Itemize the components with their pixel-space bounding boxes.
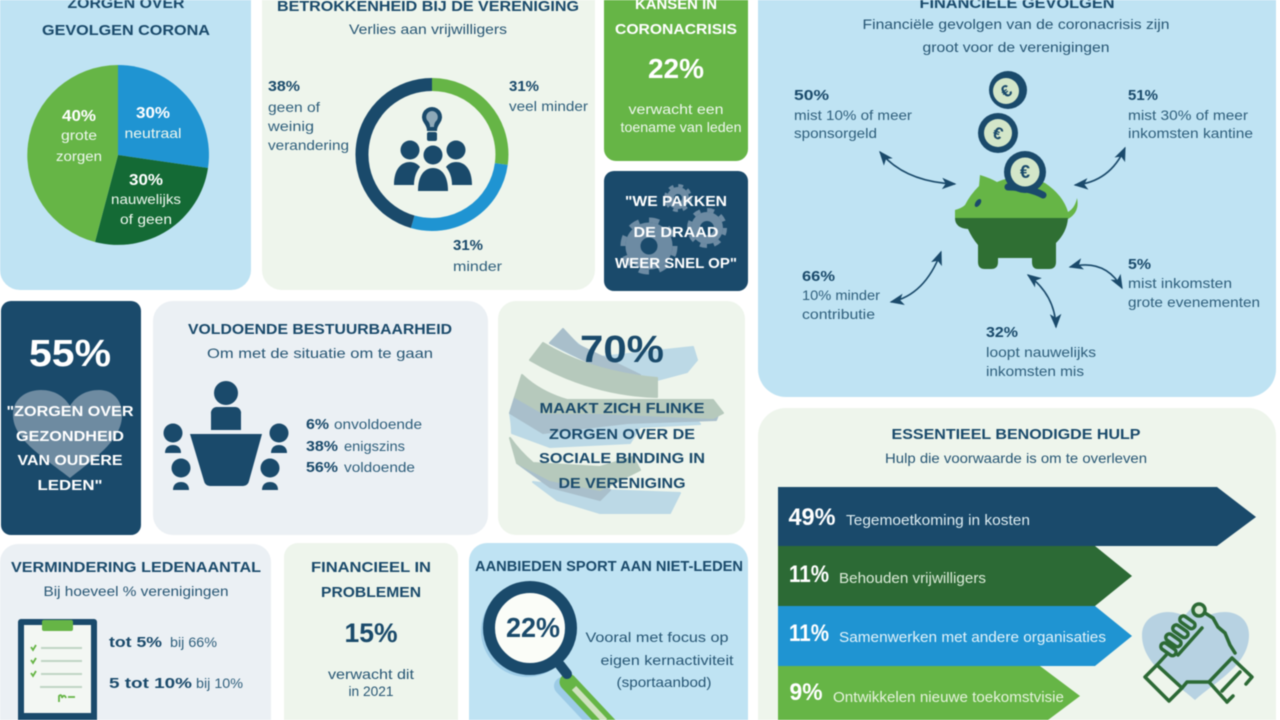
label: 50% sponsorgeld: mist 10% of meer [794, 107, 912, 123]
label: 32% inkomsten mis: inkomsten mis [986, 363, 1084, 379]
pie chart: 30% [129, 172, 163, 189]
heading: PROBLEMEN [321, 584, 421, 601]
arrow bar: 9% toekomstvisie: 9% [790, 679, 822, 706]
pie chart: 40% [62, 108, 96, 125]
heading: kansen in coronacrisis [615, 0, 737, 38]
label: 51% kantine [1128, 87, 1253, 141]
text: sociale binding: ZORGEN OVER DE [549, 426, 695, 443]
quote text: LEDEN" [38, 477, 102, 494]
icon: piggy bank with coins: € [990, 123, 1006, 144]
text: sociale binding: MAAKT ZICH FLINKE [540, 400, 704, 417]
text: focus op kernactiviteit [586, 629, 734, 690]
text: verwacht een toename van leden [620, 101, 742, 135]
panel: 55% zorgen over gezondheid [1, 301, 141, 535]
donut chart [362, 84, 502, 224]
pie chart: grote [61, 127, 97, 143]
list: percentages: 56% [306, 459, 338, 476]
list: ledenverlies: tot 5% [109, 634, 162, 651]
stat: 22%: 22% [648, 53, 704, 84]
list: ledenverlies: bij 10% [196, 675, 243, 691]
label: 5% evenementen: 5% [1128, 256, 1151, 273]
icon: heart [13, 390, 122, 478]
icon: piggy bank with coins: € [997, 81, 1016, 102]
quote text [615, 193, 737, 272]
arrow bar: 9% toekomstvisie: Ontwikkelen nieuwe toekomstvisie [833, 690, 1064, 706]
icon: magnifying glass [481, 585, 615, 720]
pie chart: nauwelijks [111, 191, 181, 207]
label: 50% sponsorgeld: 50% [794, 87, 829, 104]
panel: betrokkenheid bij de vereniging [262, 0, 595, 290]
text: sociale binding: DE VERENIGING [558, 475, 686, 492]
label: 31% minder [453, 237, 502, 274]
label: 66% contributie: 10% minder [802, 287, 880, 303]
heading: zorgen over gevolgen corona [42, 0, 210, 39]
panel: quote we pakken de draad weer snel op [604, 171, 748, 291]
list: percentages: onvoldoende [334, 416, 422, 432]
heading: ESSENTIEEL BENODIGDE HULP [892, 426, 1140, 443]
panel: vermindering ledenaantal [0, 544, 271, 720]
label: 51% kantine: inkomsten kantine [1128, 125, 1253, 141]
quote text: VAN OUDERE [18, 452, 123, 469]
label: 31% veel minder: veel minder [509, 98, 588, 114]
label: 5% evenementen [1128, 256, 1260, 310]
text: focus op kernactiviteit: eigen kernactiviteit [600, 652, 734, 668]
icon: team with light bulb [394, 107, 472, 191]
icon: piggy bank with coins: € [1020, 162, 1030, 182]
stat: 55%: 55% [29, 333, 111, 375]
quote text: GEZONDHEID [16, 428, 124, 445]
list: ledenverlies: 5 tot 10% [109, 675, 192, 692]
panel: 70% sociale binding [498, 301, 745, 535]
heading: AANBIEDEN SPORT AAN NIET-LEDEN [475, 558, 743, 575]
list: percentages: 38% [306, 438, 338, 455]
panel: financiele gevolgen [758, 0, 1276, 397]
pie chart [27, 65, 209, 245]
icon: gears [623, 186, 725, 272]
label: 50% sponsorgeld [794, 87, 912, 141]
label: 66% contributie: 66% [802, 268, 835, 285]
stat: 15%: 15% [344, 618, 398, 648]
icon: meeting table [164, 381, 288, 490]
arrow bar: 11% samenwerken: Samenwerken met andere organisaties [839, 630, 1106, 646]
label: 38% geen of weinig verandering: 38% [268, 78, 300, 95]
subheading [862, 16, 1170, 55]
arrows around piggy bank [880, 148, 1125, 327]
subheading: Hulp die voorwaarde is om te overleven [885, 450, 1147, 466]
label: 31% veel minder [509, 78, 588, 114]
label: 38% geen of weinig verandering: geen of [268, 99, 320, 115]
arrow bar: 49%: 49% [788, 504, 836, 531]
panel: kansen in coronacrisis [604, 0, 748, 161]
text: verwacht dit in 2021: verwacht dit [328, 666, 414, 682]
subheading: Om met de situatie om te gaan [207, 345, 433, 361]
text: focus op kernactiviteit: Vooral met focus op [586, 629, 729, 645]
text: focus op kernactiviteit: (sportaanbod) [616, 674, 712, 690]
heading: VOLDOENDE BESTUURBAARHEID [188, 321, 452, 338]
label: 31% minder: minder [453, 258, 502, 274]
heading: zorgen over gevolgen corona: GEVOLGEN CORONA [42, 22, 210, 39]
stat: 22%: 22% [506, 612, 560, 643]
panel: essentieel benodigde hulp [758, 408, 1276, 720]
label: 66% contributie [802, 268, 880, 322]
arrow bar: 11% behouden: Behouden vrijwilligers [839, 571, 986, 587]
label: 32% inkomsten mis: loopt nauwelijks [986, 344, 1096, 360]
label: 51% kantine: 51% [1128, 87, 1158, 104]
heading: kansen in coronacrisis: CORONACRISIS [615, 21, 737, 38]
list: percentages [306, 416, 422, 476]
label: 5% evenementen: grote evenementen [1128, 294, 1260, 310]
list: ledenverlies [109, 634, 243, 692]
text: verwacht dit in 2021: in 2021 [348, 683, 394, 699]
label: 50% sponsorgeld: sponsorgeld [794, 125, 877, 141]
label: 31% veel minder: 31% [509, 78, 539, 95]
panel: zorgen over gevolgen corona [0, 0, 251, 290]
panel: financieel in problemen [284, 543, 458, 720]
subheading: groot voor de verenigingen [922, 39, 1110, 55]
list: percentages: 6% [306, 416, 329, 433]
label: 38% geen of weinig verandering: verandering [268, 137, 349, 153]
list: ledenverlies: bij 66% [170, 634, 217, 650]
subheading: Bij hoeveel % verenigingen [44, 583, 229, 599]
quote text [6, 403, 134, 494]
label: 32% inkomsten mis: 32% [986, 324, 1018, 341]
heading: VERMINDERING LEDENAANTAL [11, 559, 261, 576]
quote text: "WE PAKKEN [625, 193, 727, 210]
arrow bar: 9% toekomstvisie [778, 666, 1080, 720]
quote text: DE DRAAD [634, 224, 719, 241]
label: 51% kantine: mist 30% of meer [1128, 107, 1248, 123]
arrow bar: 11% samenwerken [778, 606, 1132, 666]
heading: FINANCIEEL IN [311, 559, 431, 576]
panel: aanbieden sport aan niet-leden [469, 543, 748, 720]
text: verwacht een toename van leden: toename van leden [620, 119, 742, 135]
text: verwacht dit in 2021 [328, 666, 414, 699]
list: percentages: voldoende [344, 459, 415, 475]
label: 32% inkomsten mis [986, 324, 1096, 379]
heading [311, 559, 431, 601]
subheading: verlies aan vrijwilligers: Verlies aan vrijwilligers [349, 21, 507, 37]
subheading: Financiële gevolgen van de coronacrisis zijn [862, 16, 1170, 32]
text: verwacht een toename van leden: verwacht een [628, 101, 724, 117]
label: 5% evenementen: mist inkomsten [1128, 275, 1232, 291]
list: percentages: enigszins [344, 438, 405, 454]
arrow bar: 11% behouden: 11% [789, 561, 829, 588]
illustration: hands forming a globe [510, 329, 723, 513]
pie chart: 30% [136, 105, 170, 122]
icon: clipboard [18, 619, 97, 720]
panel: voldoende bestuurbaarheid [153, 301, 488, 535]
arrow bar: 11% behouden [778, 546, 1132, 606]
arrow bar: 49%: Tegemoetkoming in kosten [846, 513, 1030, 529]
arrow bar: 49% [778, 487, 1256, 546]
label: 66% contributie: contributie [802, 306, 875, 322]
quote text: "ZORGEN OVER [6, 403, 134, 420]
text: sociale binding [539, 400, 705, 492]
arrow bar: 11% samenwerken: 11% [789, 620, 829, 647]
stat: 70%: 70% [580, 329, 664, 371]
pie chart: of geen [120, 211, 172, 227]
icon: piggy bank with coins [955, 71, 1078, 269]
label: 31% minder: 31% [453, 237, 483, 254]
text: sociale binding: SOCIALE BINDING IN [539, 450, 705, 467]
label: 38% geen of weinig verandering [267, 78, 349, 153]
pie chart: zorgen [56, 148, 102, 164]
pie chart: neutraal [124, 125, 182, 141]
quote text: WEER SNEL OP" [615, 255, 737, 272]
label: 38% geen of weinig verandering: weinig [267, 118, 314, 134]
icon: clasped hands on heart [1142, 604, 1252, 702]
